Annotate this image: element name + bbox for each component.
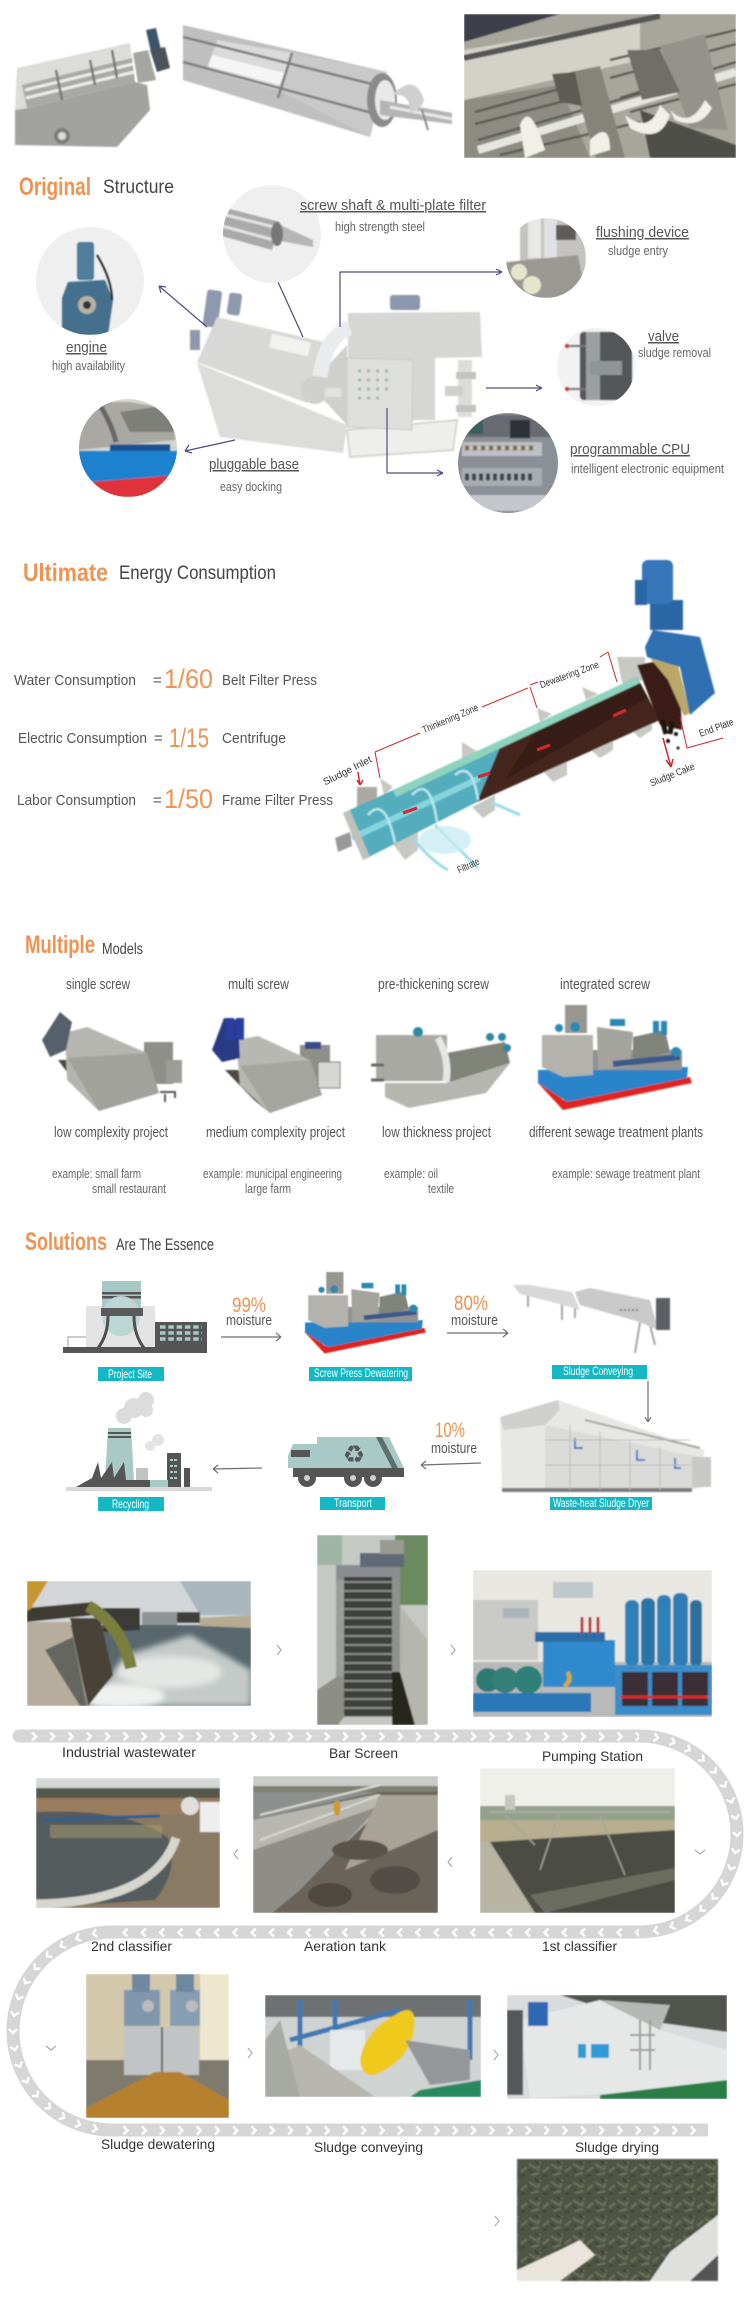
callout: pluggable base bbox=[78, 399, 299, 497]
callout: valve bbox=[557, 328, 711, 406]
callout: screw shaft: screw shaft & multi-plate filter bbox=[300, 197, 486, 214]
shaft end bbox=[335, 832, 352, 852]
heading: Original Structure: Original bbox=[19, 173, 91, 201]
image: dryer bbox=[500, 1400, 711, 1492]
row: water consumption: = bbox=[153, 672, 162, 689]
photo: bar screen bbox=[317, 1535, 428, 1725]
photo: industrial wastewater bbox=[27, 1581, 251, 1708]
diagram labels bbox=[322, 660, 736, 876]
callout: flushing device: flushing device bbox=[596, 224, 689, 241]
label: Waste-heat Sludge Dryer: Waste-heat Sludge Dryer bbox=[553, 1496, 649, 1510]
photo: dried sludge pellets bbox=[517, 2159, 718, 2281]
diagram labels: Dewatering Zone bbox=[539, 660, 601, 691]
icon: recycling plant bbox=[66, 1392, 212, 1491]
red arrows and dimension lines bbox=[357, 652, 723, 813]
callout: flushing device: sludge entry bbox=[608, 243, 668, 258]
model: single screw: small restaurant bbox=[92, 1181, 166, 1196]
photo: pumping station bbox=[473, 1570, 712, 1717]
callout: engine bbox=[36, 227, 144, 373]
heading: Ultimate Energy Consumption bbox=[23, 559, 276, 587]
section: ultimate energy consumption bbox=[14, 559, 736, 876]
label: Industrial wastewater: Industrial wastewater bbox=[62, 1744, 196, 1760]
label: 2nd classifier: 2nd classifier bbox=[91, 1938, 172, 1954]
model: multi screw: large farm bbox=[245, 1181, 291, 1196]
step: recycling bbox=[66, 1392, 212, 1511]
label: Sludge drying: Sludge drying bbox=[575, 2139, 659, 2155]
model: integrated screw: example: sewage treatment plant bbox=[552, 1166, 700, 1181]
model: pre-thickening screw: pre-thickening screw bbox=[378, 976, 489, 993]
label: Aeration tank: Aeration tank bbox=[304, 1938, 387, 1954]
photo: 2nd classifier bbox=[36, 1778, 220, 1908]
photo: aeration tank bbox=[253, 1776, 438, 1913]
row: labor consumption: 1/50 bbox=[164, 784, 213, 814]
row: water consumption: 1/60 bbox=[164, 664, 213, 694]
label: Project Site: Project Site bbox=[108, 1367, 152, 1381]
row: labor consumption: = bbox=[153, 792, 162, 809]
callout: valve: valve bbox=[648, 328, 679, 345]
row: water consumption bbox=[14, 664, 317, 694]
label: Bar Screen: Bar Screen bbox=[329, 1745, 398, 1761]
row: electric consumption: = bbox=[154, 730, 163, 747]
heading: Ultimate Energy Consumption: Ultimate bbox=[23, 559, 108, 587]
model: multi screw bbox=[203, 976, 346, 1196]
label: Transport: Transport bbox=[334, 1496, 372, 1510]
row: labor consumption bbox=[17, 784, 333, 814]
step: sludge conveying bbox=[513, 1285, 670, 1422]
model: single screw: single screw bbox=[66, 976, 130, 993]
diagram labels: Filtrate bbox=[456, 856, 482, 876]
moisture 99% bbox=[221, 1294, 281, 1341]
serpentine flow belt bbox=[9, 1730, 741, 2137]
icon: truck: ♻ bbox=[343, 1440, 365, 1469]
row: labor consumption: Frame Filter Press bbox=[222, 792, 333, 809]
section: original structure bbox=[19, 173, 724, 513]
photo: sludge drying bbox=[507, 1995, 727, 2099]
heading: Multiple Models: Models bbox=[102, 941, 143, 958]
model: multi screw: multi screw bbox=[228, 976, 289, 993]
photo: screw shaft bbox=[183, 25, 452, 137]
model: single screw: example: small farm bbox=[52, 1166, 141, 1181]
photo: screw internals bbox=[464, 14, 736, 158]
icon: factory bbox=[63, 1281, 207, 1353]
model: single screw: low complexity project bbox=[54, 1124, 169, 1141]
row: water consumption: Belt Filter Press bbox=[222, 672, 317, 689]
mounting feet bbox=[380, 657, 652, 860]
diagram labels: Sludge Inlet bbox=[322, 754, 374, 788]
callout: programmable CPU bbox=[457, 413, 724, 513]
heading: Solutions Are The Essence: Solutions bbox=[25, 1228, 107, 1256]
model: multi screw: example: municipal engineering bbox=[203, 1166, 342, 1181]
section: solutions bbox=[25, 1228, 711, 1511]
callout: programmable CPU: programmable CPU bbox=[570, 441, 690, 458]
model: integrated screw bbox=[529, 976, 703, 1181]
splash bbox=[413, 802, 520, 870]
callout: valve: sludge removal bbox=[638, 345, 711, 360]
heading: Solutions Are The Essence bbox=[25, 1228, 214, 1256]
heading: Ultimate Energy Consumption: Energy Consumption bbox=[119, 563, 276, 584]
panel: top photos bbox=[15, 14, 736, 158]
model: pre-thickening screw bbox=[371, 976, 511, 1196]
photo: screw press close-up bbox=[15, 28, 170, 147]
row: electric consumption: Electric Consumption bbox=[18, 730, 147, 747]
heading: Original Structure bbox=[19, 173, 174, 201]
step: transport bbox=[288, 1437, 404, 1510]
arrows to components bbox=[159, 269, 542, 476]
main machine illustration bbox=[190, 289, 482, 457]
model: integrated screw: integrated screw bbox=[560, 976, 650, 993]
row: electric consumption: 1/15 bbox=[169, 723, 209, 753]
callout: programmable CPU: intelligent electronic equipment bbox=[571, 461, 724, 476]
label: Sludge conveying: Sludge conveying bbox=[314, 2139, 423, 2155]
label: 1st classifier: 1st classifier bbox=[542, 1938, 617, 1954]
heading: Solutions Are The Essence: Are The Essence bbox=[116, 1235, 214, 1254]
model: pre-thickening screw: low thickness project bbox=[382, 1124, 492, 1141]
model: pre-thickening screw: example: oil bbox=[384, 1166, 438, 1181]
image: conveyor bbox=[513, 1285, 670, 1353]
callout: screw shaft: high strength steel bbox=[335, 219, 425, 234]
model: integrated screw: different sewage treatment plants bbox=[529, 1124, 703, 1141]
moisture 99%: 99% bbox=[232, 1294, 266, 1317]
label: Sludge Conveying: Sludge Conveying bbox=[563, 1364, 633, 1378]
moisture 10%: 10% bbox=[435, 1419, 465, 1442]
heading: Multiple Models: Multiple bbox=[25, 931, 95, 959]
moisture 80%: 80% bbox=[454, 1292, 488, 1315]
tube body bbox=[343, 740, 503, 860]
moisture 80% bbox=[447, 1292, 508, 1337]
label: Screw Press Dewatering: Screw Press Dewatering bbox=[314, 1366, 408, 1380]
drive bbox=[637, 660, 682, 730]
step: screw press dewatering bbox=[304, 1272, 426, 1381]
step: waste-heat sludge dryer bbox=[500, 1400, 711, 1510]
label: Recycling: Recycling bbox=[112, 1497, 149, 1511]
diagram labels: End Plate bbox=[698, 717, 736, 740]
step: project site bbox=[63, 1281, 207, 1381]
section: multiple models bbox=[25, 931, 703, 1196]
callout: flushing device bbox=[506, 218, 689, 298]
photo: sludge conveying bbox=[265, 1995, 481, 2097]
section: treatment process flow bbox=[9, 1535, 741, 2281]
model: single screw bbox=[42, 976, 182, 1196]
callout: engine: engine bbox=[66, 339, 107, 356]
model: pre-thickening screw: textile bbox=[428, 1181, 454, 1196]
row: labor consumption: Labor Consumption bbox=[17, 792, 136, 809]
callout: engine: high availability bbox=[52, 358, 125, 373]
diagram labels: Thinkening Zone bbox=[421, 702, 481, 736]
label: Pumping Station: Pumping Station bbox=[542, 1748, 643, 1764]
photo: 1st classifier bbox=[480, 1768, 675, 1913]
moisture 80%: moisture bbox=[451, 1312, 498, 1329]
row: electric consumption: Centrifuge bbox=[222, 730, 286, 747]
callout: pluggable base: pluggable base bbox=[209, 456, 299, 473]
row: electric consumption bbox=[18, 723, 286, 753]
row: water consumption: Water Consumption bbox=[14, 672, 136, 689]
callout: screw shaft bbox=[222, 185, 486, 283]
small direction chevrons bbox=[46, 1645, 705, 2226]
moisture 10%: moisture bbox=[431, 1440, 477, 1457]
sludge inlet bbox=[357, 787, 377, 807]
diagram labels: Sludge Cake bbox=[649, 761, 697, 789]
label: Sludge dewatering: Sludge dewatering bbox=[101, 2136, 215, 2152]
callout: pluggable base: easy docking bbox=[220, 479, 282, 494]
model: multi screw: medium complexity project bbox=[206, 1124, 346, 1141]
photo: sludge dewatering bbox=[86, 1974, 229, 2118]
heading: Original Structure: Structure bbox=[103, 177, 174, 198]
moisture 99%: moisture bbox=[226, 1312, 272, 1329]
diagram: screw press cross-section bbox=[322, 560, 736, 876]
moisture 10% bbox=[421, 1419, 481, 1469]
